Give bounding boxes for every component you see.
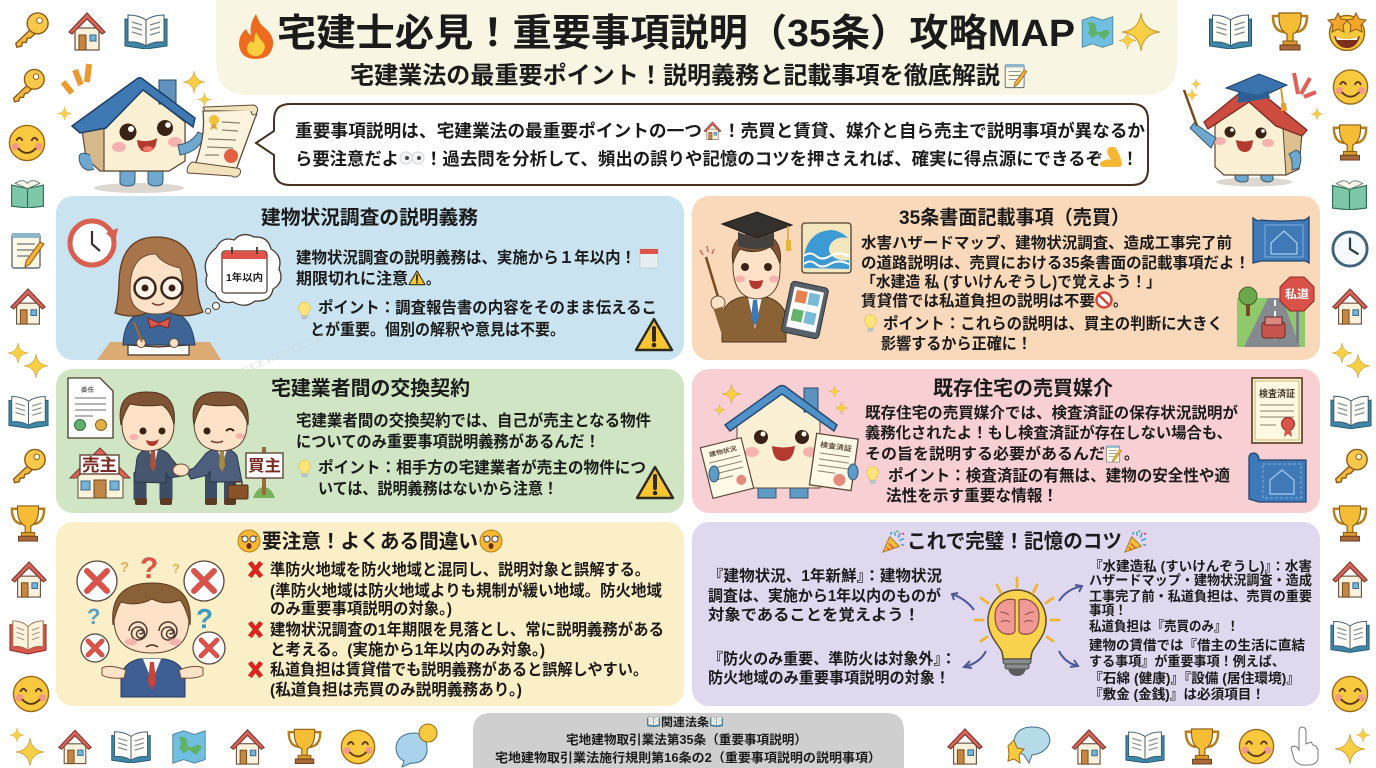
- icon: warning triangle: [637, 467, 673, 498]
- bubble text line 1: ！売買と賃貸、媒介と自ら売主で説明事項が異なるか: [723, 121, 1146, 141]
- icon: X speech bubble: [193, 632, 225, 664]
- icon: shocked face: [480, 530, 502, 552]
- body text: 宅建業者間の交換契約では、自己が売主となる物件: [296, 411, 651, 430]
- icon: buyer sign: 買主: [248, 456, 281, 475]
- icon: book: [1331, 621, 1369, 652]
- icon: trophy: [12, 506, 44, 541]
- heading: 宅建業者間の交換契約: [271, 377, 470, 400]
- icon: certificate: 検査済証: [1259, 388, 1295, 400]
- icon: blueprint: [1253, 217, 1309, 263]
- icon: left certificate: 建物状況: [708, 444, 737, 459]
- body text: いては、説明義務はないから注意！: [318, 479, 558, 498]
- icon: lightbulb with brain: [975, 578, 1059, 676]
- icon: house: [12, 562, 46, 597]
- icon: sparkles: [1335, 728, 1370, 764]
- icon: clock with arrow: [70, 221, 118, 265]
- icon: X speech bubble: [81, 634, 109, 662]
- icon: scroll document: [187, 105, 258, 177]
- icon: certificate: [1252, 378, 1302, 443]
- body text: ポイント：これらの説明は、買主の判断に大きく: [883, 314, 1223, 333]
- icon: trophy: [1334, 506, 1366, 541]
- panel: 既存住宅の売買媒介: [692, 369, 1320, 513]
- question marks: ?: [87, 604, 100, 629]
- question marks: ?: [120, 559, 129, 576]
- memory tip: 防火: 防火地域のみ重要事項説明の対象！: [708, 668, 950, 687]
- border icons: right column: [1331, 70, 1371, 712]
- body text: 既存住宅の売買媒介では、検査済証の保存状況説明が: [865, 403, 1238, 422]
- bubble text line 2: ら要注意だよ: [295, 149, 399, 169]
- icon: key: [14, 449, 45, 483]
- icon: handshake: [173, 464, 189, 476]
- icon: stars: [1332, 343, 1370, 378]
- icon: clock: [1333, 232, 1367, 266]
- icon: book: [112, 732, 150, 763]
- icon: calendar 1年以内: 1年以内: [226, 271, 263, 284]
- icon: muscle emoji: [1100, 147, 1122, 167]
- icon: house: [1072, 730, 1106, 764]
- heading: 35条書面記載事項（売買）: [899, 206, 1130, 229]
- bubble text line 2: ！: [1122, 149, 1138, 169]
- memory tip: 水建造私: [1089, 558, 1312, 634]
- icon: smiley: [1333, 70, 1368, 104]
- heading: 要注意！よくある間違い: [262, 530, 478, 553]
- icon: map: [1082, 17, 1113, 47]
- body text: 水害ハザードマップ、建物状況調査、造成工事完了前: [861, 233, 1232, 252]
- body text: [861, 233, 1250, 353]
- footer: related laws: [473, 713, 904, 768]
- icon: house with trees: [948, 729, 982, 764]
- border icons: top left: [16, 13, 167, 50]
- body text: 法性を示す重要な情報！: [886, 486, 1058, 505]
- icon: right certificate: 検査済証: [820, 440, 852, 453]
- body text: 「水建造 私 (すいけんぞうし)で覚えよう！」: [861, 272, 1161, 291]
- mistake list: 私道負担は賃貸借でも説明義務があると誤解しやすい。: [270, 660, 648, 679]
- memory tip: 建物状況: 調査は、実施から1年以内のものが: [708, 586, 941, 605]
- heading: 既存住宅の売買媒介: [933, 377, 1113, 400]
- icon: key: [1336, 449, 1367, 483]
- memory tip: 賃借: 建物の賃借では『借主の生活に直結: [1089, 637, 1305, 653]
- memory tip: 賃借: する事項』が重要事項！例えば、: [1089, 653, 1285, 669]
- icon: calendar emoji: [640, 249, 658, 268]
- icon: house: [231, 730, 264, 764]
- illustration: girl at desk: [97, 237, 221, 360]
- icon: party popper: [883, 530, 904, 552]
- arrow: lower right: [1059, 651, 1078, 667]
- icon: star-eyes face: [1328, 13, 1366, 50]
- body text: 。: [1124, 446, 1139, 463]
- question marks: ?: [140, 552, 158, 585]
- icon: flood wave card: [802, 223, 851, 273]
- icon: road with stop sign: 私道: [1285, 287, 1310, 301]
- memory tip: 水建造私: 私道負担は『売買のみ』！: [1089, 618, 1239, 634]
- bubble text line 2: ！過去問を分析して、頻出の誤りや記憶のコツを押さえれば、確実に得点源にできるぞ: [425, 149, 1103, 169]
- icon: book: [125, 15, 167, 49]
- mistake list: と考える。(実施から1年以内のみ対象。): [270, 640, 545, 659]
- mistake list: 建物状況調査の1年期限を見落とし、常に説明義務がある: [270, 620, 664, 639]
- icon: house: [59, 730, 91, 764]
- body text: 期限切れに注意: [296, 270, 408, 288]
- icon: X thought bubble: [184, 561, 224, 601]
- icon: pointer stick: [1184, 90, 1197, 126]
- body text: 建物状況調査の説明義務は、実施から１年以内！: [296, 248, 636, 267]
- heading: 建物状況調査の説明義務: [261, 207, 478, 229]
- body text: ポイント：検査済証の有無は、建物の安全性や適: [888, 466, 1230, 485]
- icon: stars: [8, 343, 48, 378]
- icon: shocked face: [238, 530, 260, 552]
- icon: house: [1333, 562, 1367, 597]
- icon: trophy: [1186, 729, 1218, 764]
- question marks: ?: [196, 603, 213, 634]
- icon: bulb: [299, 460, 310, 477]
- footer: related laws: 宅地建物取引業法施行規則第16条の2（重要事項説明の説明事項）: [495, 750, 881, 765]
- icon: house: [69, 13, 105, 50]
- border icons: left column: [8, 69, 49, 712]
- mistake list: (私道負担は売買のみ説明義務あり。): [270, 680, 522, 699]
- icon: notepad: [12, 233, 44, 268]
- heading: これで完璧！記憶のコツ: [907, 530, 1122, 553]
- icon: book: [710, 717, 723, 727]
- icon: red cross: [248, 661, 263, 678]
- body text: の道路説明は、売買における35条書面の記載事項だよ！: [861, 253, 1250, 272]
- illustration: left businessman: [120, 392, 183, 505]
- icon: house emoji: [704, 122, 721, 140]
- body text: [296, 248, 658, 339]
- title panel: [216, 0, 1177, 95]
- icon: trophy: [289, 729, 320, 764]
- icon: smiley: [13, 676, 49, 712]
- body text: 影響するから正確に！: [881, 334, 1032, 353]
- footer: related laws: 宅地建物取引業法第35条（重要事項説明）: [566, 732, 807, 747]
- memory tip: 防火: [708, 649, 956, 687]
- icon: book: [1331, 396, 1371, 429]
- icon: speech bubble: [1008, 727, 1050, 763]
- bubble text line 1: 重要事項説明は、宅建業法の最重要ポイントの一つ: [295, 121, 702, 141]
- body text: についてのみ重要事項説明義務があるんだ！: [296, 432, 600, 451]
- memory tip: 建物状況: 『建物状況、1年新鮮』：建物状況: [708, 566, 942, 585]
- icon: red book: [10, 621, 46, 654]
- body text: とが重要。個別の解釈や意見は不要。: [310, 320, 565, 339]
- icon: hand: [1291, 727, 1318, 765]
- icon: smiley: [1239, 729, 1274, 764]
- border icons: bottom right row: [948, 727, 1370, 765]
- icon: key: [14, 69, 44, 102]
- icon: left certificate: [700, 438, 754, 498]
- subtitle: 宅建業法の最重要ポイント！説明義務と記載事項を徹底解説: [350, 62, 1000, 90]
- arrow: upper left: [952, 593, 974, 610]
- icon: house blueprint: [1249, 453, 1306, 502]
- memory tip: 建物状況: [708, 566, 942, 624]
- memory tip: 水建造私: 『水建造私 (すいけんぞうし)』：水害: [1089, 558, 1312, 574]
- panel: 建物状況調査の説明義務: [56, 196, 684, 360]
- icon: warning triangle: [636, 319, 672, 350]
- icon: bulb: [865, 314, 876, 332]
- icon: smiley: [9, 125, 45, 161]
- speech bubble: [256, 104, 1148, 185]
- illustration: teacher with tablet: [700, 212, 829, 342]
- icon: contract document: [68, 378, 113, 438]
- memory tip: 建物状況: 対象であることを覚えよう！: [708, 605, 920, 624]
- body text: 義務化されたよ！もし検査済証が存在しない場合も、: [865, 423, 1232, 442]
- icon: warning emoji: [409, 271, 425, 285]
- icon: memo: [1005, 64, 1027, 88]
- body text: ポイント：相手方の宅建業者が売主の物件につ: [318, 458, 646, 477]
- arrow: upper right: [1059, 585, 1082, 601]
- illustration: confused man: [77, 552, 225, 697]
- icon: eyes emoji: [400, 152, 424, 164]
- memory tip: 防火: 『防火のみ重要、準防火は対象外』：: [708, 649, 956, 668]
- panel: 35条書面記載事項(売買): [692, 196, 1320, 360]
- icon: bulb: [867, 466, 878, 484]
- bubble text line 1: [295, 121, 1146, 141]
- body text: 。: [426, 271, 440, 288]
- icon: party popper: [1125, 530, 1146, 552]
- icon: green book: [1333, 181, 1366, 210]
- icon: smiley: [1332, 676, 1368, 712]
- memory tip: 賃借: 『石綿 (健康)』『設備 (居住環境)』: [1089, 670, 1300, 686]
- panel: これで完璧 記憶のコツ: [692, 522, 1320, 706]
- icon: map: [173, 731, 205, 763]
- body text: ポイント：調査報告書の内容をそのまま伝えるこ: [318, 298, 657, 317]
- question marks: [87, 552, 213, 634]
- body text: 。: [1113, 293, 1127, 310]
- question marks: ?: [172, 561, 180, 576]
- arrow: lower left: [964, 651, 986, 668]
- icon: buyer sign: [246, 447, 283, 498]
- memory tip: 水建造私: 事項！: [1089, 602, 1127, 618]
- icon: contract document: 委任: [81, 386, 94, 394]
- thought bubble with calendar: [205, 235, 281, 314]
- icon: red cross: [248, 561, 263, 578]
- icon: house: [11, 289, 45, 324]
- panel: 宅建業者間の交換契約: [56, 369, 684, 513]
- mistake list: のみ重要事項説明の対象。): [270, 599, 452, 618]
- border icons: top right: [1210, 13, 1366, 50]
- icon: speech bubble: [396, 724, 437, 767]
- mistake list: 準防火地域を防火地域と混同し、説明対象と誤解する。: [270, 560, 650, 579]
- icon: X thought bubble: [77, 561, 117, 601]
- icon: tablet: [781, 281, 829, 339]
- memory tip: 賃借: 『敷金 (金銭)』は必須項目！: [1089, 686, 1265, 702]
- memory tip: 賃借: [1089, 637, 1305, 702]
- illustration: right businessman: [173, 392, 248, 505]
- icon: fire: [239, 14, 273, 59]
- icon: smiley: [341, 730, 375, 764]
- icon: prohibited: [1096, 292, 1112, 308]
- mistake list: (準防火地域は防火地域よりも規制が緩い地域。防火地域: [270, 581, 662, 600]
- body text: [865, 403, 1238, 505]
- icon: open notebook: [128, 345, 189, 355]
- icon: trophy: [1273, 13, 1307, 50]
- icon: book: [9, 397, 48, 428]
- heading: main title: 宅建士必見！重要事項説明（35条）攻略MAP: [277, 13, 1075, 55]
- icon: book: [1210, 15, 1252, 49]
- body text: [296, 411, 651, 498]
- mistake list: [248, 560, 664, 699]
- illustration: house with certificates: [700, 384, 858, 498]
- watermark: □□□□□□□□□□□□: [225, 330, 329, 382]
- icon: book: [1126, 732, 1164, 763]
- icon: road with stop sign: [1237, 277, 1314, 347]
- icon: green book: [12, 181, 43, 208]
- body text: 賃貸借では私道負担の説明は不要: [861, 291, 1095, 310]
- icon: trophy: [1334, 125, 1366, 160]
- memory tip: 水建造私: ハザードマップ・建物状況調査・造成: [1089, 572, 1312, 588]
- body text: その旨を説明する必要があるんだ: [865, 444, 1105, 463]
- icon: red cross: [248, 621, 263, 638]
- mascot: left house with scroll: [58, 64, 258, 193]
- icon: briefcase: [228, 482, 248, 499]
- icon: house: [1333, 289, 1367, 324]
- panel: 要注意 よくある間違い: [56, 522, 684, 706]
- icon: memo: [1106, 445, 1122, 462]
- icon: sparkles: [10, 728, 44, 766]
- border icons: bottom left row: [10, 724, 437, 767]
- icon: bulb: [299, 302, 310, 319]
- footer: related laws: 関連法条: [661, 715, 710, 729]
- icon: seller house: [70, 448, 130, 498]
- memory tip: 水建造私: 工事完了前・私道負担は、売買の重要: [1089, 588, 1312, 604]
- icon: book: [647, 717, 660, 727]
- icon: seller house: 売主: [82, 455, 117, 475]
- icon: key: [16, 13, 48, 47]
- icon: sparkles: [1119, 13, 1160, 51]
- mascot: right house with mortarboard: [1184, 73, 1323, 186]
- icon: right certificate: [809, 433, 858, 491]
